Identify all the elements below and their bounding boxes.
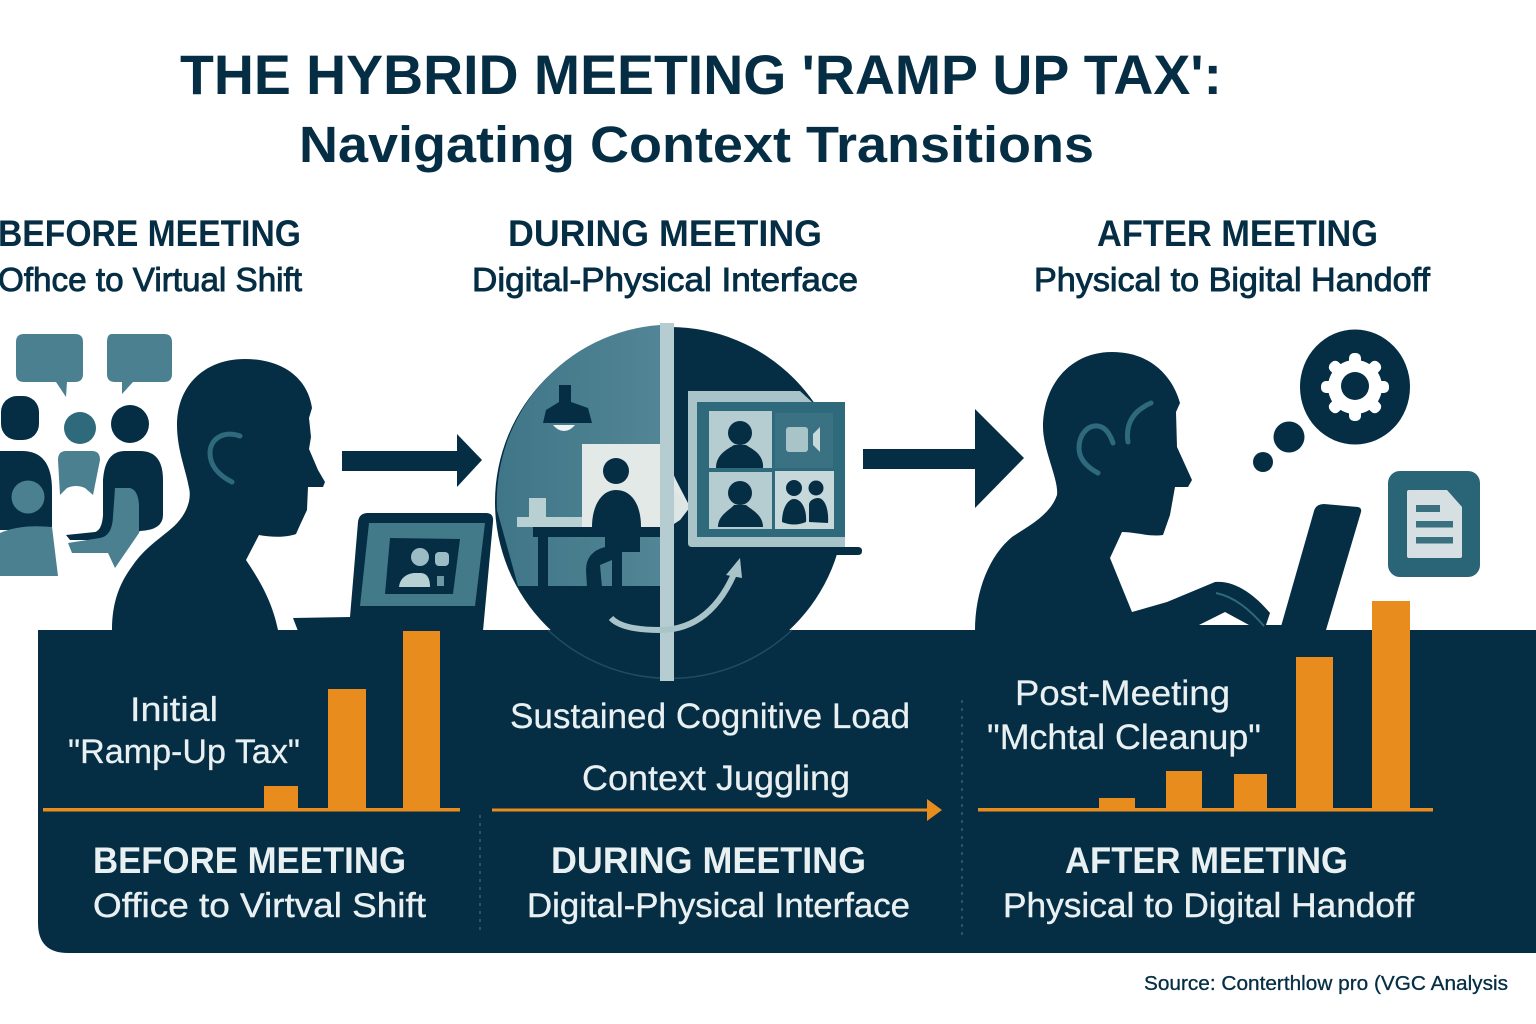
icon: thought bubble with gear (1253, 330, 1410, 472)
caption: before meeting: Office to Virtval Shift (93, 887, 427, 925)
heading: after meeting: Physical to Bigital Handoff (1034, 261, 1431, 298)
icon: person silhouette before meeting (112, 359, 325, 630)
icon: laptop with video call (293, 513, 493, 631)
caption: during meeting: DURING MEETING (551, 840, 866, 881)
text: sustained load and juggling: Sustained Cognitive Load (510, 697, 910, 736)
text: mental cleanup: "Mchtal Cleanup" (987, 718, 1261, 757)
heading: during meeting: Digital-Physical Interface (472, 261, 858, 298)
chart: before meeting bars (43, 631, 460, 812)
caption: before meeting (93, 840, 427, 925)
text: sustained load and juggling (510, 697, 910, 798)
text: initial ramp-up tax (68, 691, 300, 771)
caption: after meeting: Physical to Digital Handoff (1003, 887, 1415, 925)
heading: after meeting: AFTER MEETING (1097, 213, 1378, 254)
chart: after meeting bars (978, 601, 1433, 812)
arrow: before to during (342, 434, 482, 487)
icon: person silhouette after meeting at laptop (975, 352, 1361, 631)
text: initial ramp-up tax: Initial (130, 691, 218, 729)
heading: during meeting: DURING MEETING (508, 213, 822, 254)
title (180, 43, 1222, 173)
icon: split circle physical and digital (495, 323, 862, 681)
source note: Source: Conterthlow pro (VGC Analysis (1144, 973, 1508, 995)
heading: during meeting (472, 213, 858, 298)
title: THE HYBRID MEETING 'RAMP UP TAX': (180, 43, 1222, 106)
icon: document tile (1388, 471, 1480, 577)
chart: during meeting timeline arrow (492, 799, 942, 821)
bottom band panel (38, 630, 1536, 953)
text: initial ramp-up tax: "Ramp-Up Tax" (68, 733, 300, 771)
caption: before meeting: BEFORE MEETING (93, 840, 406, 881)
caption: after meeting (1003, 840, 1415, 925)
caption: during meeting (527, 840, 910, 925)
text: sustained load and juggling: Context Juggling (582, 759, 850, 798)
heading: before meeting (0, 213, 302, 298)
heading: before meeting: Ofhce to Virtual Shift (0, 261, 302, 298)
text: mental cleanup (987, 674, 1261, 757)
caption: during meeting: Digital-Physical Interface (527, 887, 910, 925)
icon: office group with speech bubbles (0, 334, 172, 576)
heading: after meeting (1034, 213, 1431, 298)
caption: after meeting: AFTER MEETING (1065, 840, 1348, 881)
heading: before meeting: BEFORE MEETING (0, 213, 301, 254)
arrow: during to after (863, 409, 1024, 508)
title: Navigating Context Transitions (299, 116, 1094, 173)
text: mental cleanup: Post-Meeting (1015, 674, 1230, 713)
